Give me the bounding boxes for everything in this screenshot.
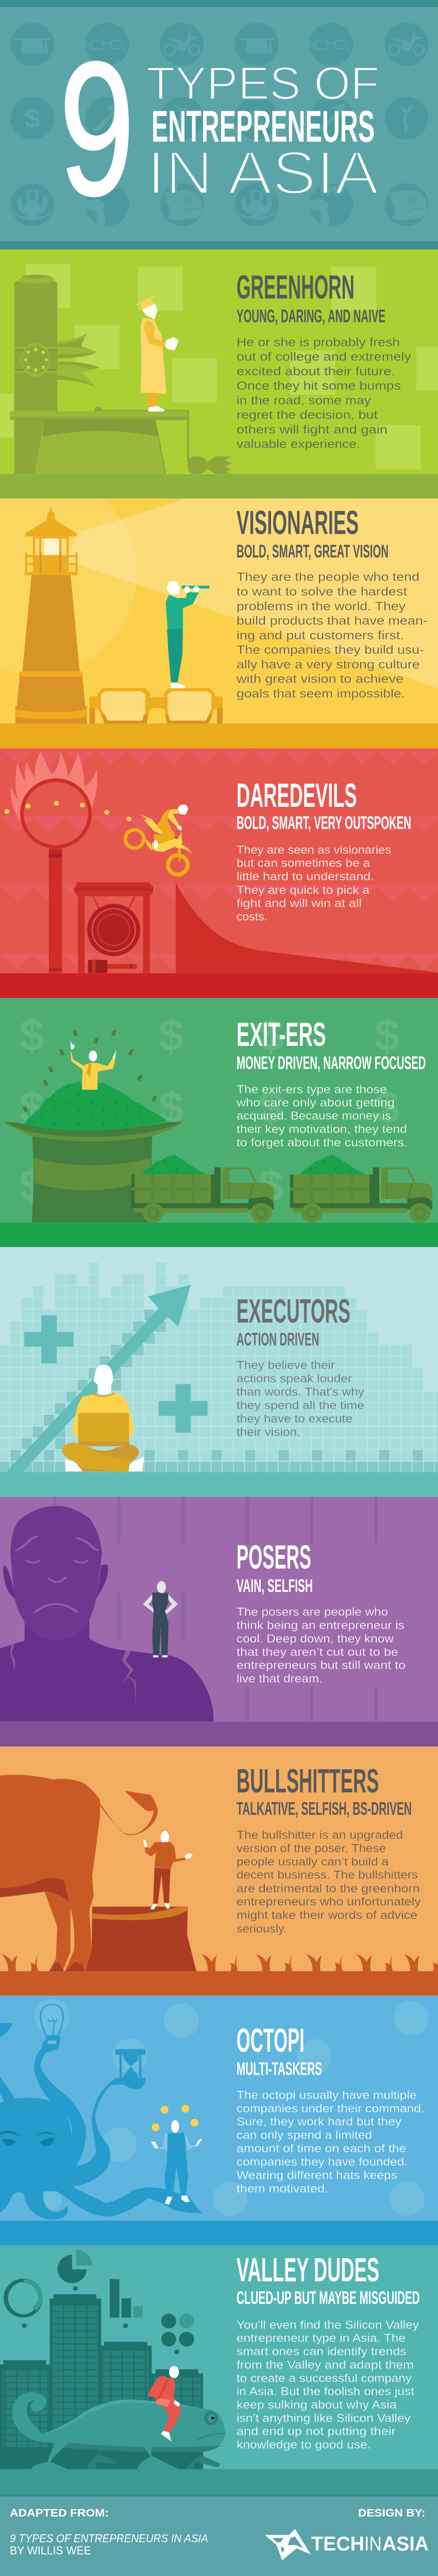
panel: header [0, 0, 438, 249]
dollar sign background: $ [375, 1161, 399, 1211]
body: You'll even find the Silicon Valley [237, 2318, 419, 2331]
body: costs. [237, 910, 267, 923]
body: with great vision to achieve [236, 672, 403, 686]
dollar sign background: $ [375, 1010, 399, 1060]
icon: hourglass [115, 2049, 145, 2083]
body: than words. That's why [237, 1385, 365, 1398]
body: think being an entrepreneur is [237, 1618, 405, 1632]
panel: visionaries [0, 472, 438, 749]
credits: adapted from: ADAPTED FROM: [10, 2506, 109, 2519]
figure: man with telescope [165, 581, 210, 688]
title [59, 23, 379, 235]
illustration: bull, stump and grass [0, 1775, 438, 1971]
body: keep sulking about why Asia [237, 2398, 397, 2411]
body: from the Valley and adapt them [237, 2358, 414, 2371]
body: can only spend a limited [237, 2128, 372, 2142]
icon: plus [159, 1384, 208, 1433]
body: entrepreneur type in Asia. The [237, 2331, 406, 2345]
logo: tech in asia: IN [364, 2533, 382, 2555]
circle background [34, 1999, 429, 2216]
body: The octopi usually have multiple [237, 2088, 417, 2102]
body: build products that have mean- [237, 614, 428, 628]
body: out of college and extremely [237, 350, 411, 364]
panel: greenhorn [0, 249, 438, 499]
illustration: grid skyline, arrow and crosses [0, 1263, 438, 1472]
ground [0, 2469, 438, 2494]
panel: daredevils [0, 749, 438, 998]
credits: adapted from: 9 TYPES OF ENTREPRENEURS IN ASIA [10, 2532, 208, 2545]
ground [0, 724, 438, 749]
body: He or she is probably fresh [237, 335, 400, 349]
body: entrepreneurs but still want to [237, 1658, 406, 1672]
text block: visionaries [236, 504, 428, 701]
icon: plus [24, 1315, 74, 1363]
body [237, 2318, 419, 2451]
panel: footer [0, 2497, 438, 2576]
background icon medallions [10, 23, 429, 226]
panel: valley dudes [0, 2246, 438, 2497]
body [237, 1828, 421, 1935]
body: to forget about the customers. [237, 1136, 408, 1149]
illustration: lighthouse and glasses [15, 507, 223, 724]
figure: juggling man [151, 2105, 203, 2205]
light beam [0, 499, 438, 688]
truck [290, 1155, 432, 1223]
dollar sign background: $ [375, 1082, 399, 1132]
body: in Asia. But the foolish ones just [237, 2384, 415, 2398]
ground [0, 1472, 438, 1497]
body: goals that seem impossible. [237, 687, 405, 701]
dollar sign background: $ [20, 1082, 44, 1132]
body: them motivated. [237, 2182, 328, 2195]
body: but can sometimes be a [237, 856, 370, 870]
body: might take their words of advice [237, 1908, 417, 1922]
body: their vision. [237, 1425, 300, 1438]
body: ally have a very strong culture [237, 658, 420, 671]
figure: man meditating with laptop [62, 1365, 144, 1471]
dollar sign background [20, 1010, 399, 1211]
body: problems in the world. They [237, 599, 406, 613]
body: ing and put customers first. [237, 629, 404, 642]
ground [0, 1971, 438, 1995]
heading: EXIT-ERS [237, 1016, 326, 1053]
logo: tech in asia: TECH [311, 2533, 364, 2555]
body: version of the poser. These [237, 1841, 386, 1855]
panel: bullshitters [0, 1747, 438, 1995]
vertical bars background [53, 1497, 377, 1721]
body: isn’t anything like Silicon Valley [237, 2411, 411, 2425]
body: fight and will win at all [237, 896, 362, 910]
credits: design by: DESIGN BY: [358, 2506, 426, 2519]
body: They are the people who tend [237, 570, 419, 584]
body [237, 1605, 406, 1685]
heading: OCTOPI [237, 2022, 305, 2059]
illustration: octopus with bulb and hourglass [0, 2005, 202, 2219]
figure: man with backpack [148, 2366, 181, 2442]
illustration: wooden training dummy and platform [10, 275, 232, 474]
body: amount of time on each of the [237, 2142, 407, 2155]
ground [0, 1722, 438, 1747]
logo: tech in asia [265, 2529, 429, 2560]
body: others will fight and gain [237, 423, 388, 436]
body: smart ones can identify trends [237, 2345, 407, 2358]
heading: POSERS [237, 1538, 311, 1575]
body: Wearing different hats keeps [237, 2168, 397, 2182]
background icon medallions: $ [249, 104, 264, 133]
buildings [0, 2294, 203, 2469]
illustration: large sad face and small figure [0, 1506, 214, 1721]
panel: posers [0, 1497, 438, 1747]
ground [0, 474, 438, 499]
credits: adapted from [10, 2506, 208, 2557]
body [237, 1358, 365, 1438]
body [237, 2088, 425, 2195]
body: actions speak louder [237, 1371, 352, 1385]
title: IN ASIA [147, 139, 379, 207]
dollar sign background: $ [159, 1010, 183, 1060]
body [236, 570, 428, 701]
figure: small man [143, 1581, 178, 1657]
text block: octopi [237, 2022, 425, 2195]
figure: gesturing man [143, 1831, 193, 1910]
illustration: city, charts and chameleon [0, 2249, 226, 2469]
body: cool. Deep down, they know [237, 1632, 394, 1645]
body: to want to solve the hardest [237, 585, 407, 599]
figure: graduate [136, 296, 179, 412]
ground [0, 2221, 438, 2246]
body: they spend all the time [237, 1398, 364, 1412]
panel: exit-ers [0, 998, 438, 1247]
dollar sign background: $ [259, 1010, 283, 1060]
body: The companies they build usu- [237, 643, 424, 657]
body [236, 1082, 408, 1149]
figure: man throwing money [71, 1041, 116, 1091]
body: valuable experience. [237, 437, 360, 451]
body: live that dream. [237, 1672, 323, 1685]
truck [131, 1155, 274, 1223]
body: their key motivation, they tend [237, 1122, 407, 1136]
ground [0, 973, 438, 998]
text block: executors [237, 1293, 365, 1438]
body: They are quick to pick a [237, 883, 369, 896]
zigzag background [0, 749, 438, 970]
body: The bullshitter is an upgraded [237, 1828, 403, 1841]
subheading: MULTI-TASKERS [237, 2059, 322, 2079]
subheading: VAIN, SELFISH [237, 1576, 313, 1596]
body: decent business. The bullshitters [237, 1868, 418, 1882]
body [237, 843, 391, 923]
body: knowledge to good use. [237, 2438, 371, 2451]
dollar sign background: $ [20, 1010, 44, 1060]
text block: greenhorn [237, 268, 411, 451]
body: They are seen as visionaries [237, 843, 391, 856]
dollar sign background: $ [259, 1161, 283, 1211]
panel: executors [0, 1247, 438, 1497]
panel: octopi [0, 1995, 438, 2246]
body [237, 335, 411, 451]
figure: motorbike rider [125, 804, 192, 874]
text block: bullshitters [237, 1762, 421, 1935]
body: acquired. Because money is [237, 1109, 391, 1122]
body: that they aren’t cut out to be [237, 1645, 398, 1658]
body: companies under their command. [237, 2102, 425, 2115]
body: little hard to understand. [237, 870, 374, 883]
dollar sign background: $ [259, 1082, 283, 1132]
illustration: flaming hoop, gong and ramp [5, 751, 438, 973]
body: who care only about getting [236, 1096, 395, 1109]
body: entrepreneurs who unfortunately [237, 1895, 421, 1908]
body: Once they hit some bumps [237, 379, 401, 393]
title: TYPES OF [146, 57, 379, 109]
logo: tech in asia: ASIA [382, 2533, 429, 2555]
body: They believe their [237, 1358, 335, 1371]
text block: posers [237, 1538, 406, 1685]
body: regret the decision, but [237, 408, 378, 422]
illustration: top hat of money and trucks [4, 1030, 432, 1223]
icon: light bulb [41, 2005, 63, 2044]
text block: exit-ers [236, 1016, 426, 1149]
body: excited about their future. [237, 365, 395, 378]
background icon medallions: $ [24, 104, 40, 133]
body: Sure, they work hard but they [237, 2115, 402, 2128]
chameleon [12, 2392, 226, 2469]
body: in the road, some may [237, 394, 371, 408]
body: people usually can’t build a [237, 1855, 389, 1868]
body: they have to execute [237, 1412, 352, 1425]
body: The posers are people who [237, 1605, 388, 1618]
body: and end up not putting their [237, 2425, 396, 2438]
charts [6, 2255, 194, 2354]
dollar sign background: $ [159, 1082, 183, 1132]
body: seriously. [237, 1922, 287, 1935]
body: companies they have founded. [237, 2155, 408, 2168]
text block: valley dudes [237, 2251, 420, 2451]
subheading: ACTION DRIVEN [237, 1330, 319, 1349]
text block: daredevils [237, 777, 411, 923]
credits: adapted from: BY WILLIS WEE [10, 2544, 91, 2557]
title: 9 [59, 23, 134, 235]
body: to create a successful company [237, 2371, 412, 2384]
body: The exit-ers type are those [237, 1082, 387, 1096]
body: are detrimental to the greenhorn [237, 1882, 420, 1895]
ground [0, 1223, 438, 1247]
dollar sign background: $ [20, 1161, 44, 1211]
